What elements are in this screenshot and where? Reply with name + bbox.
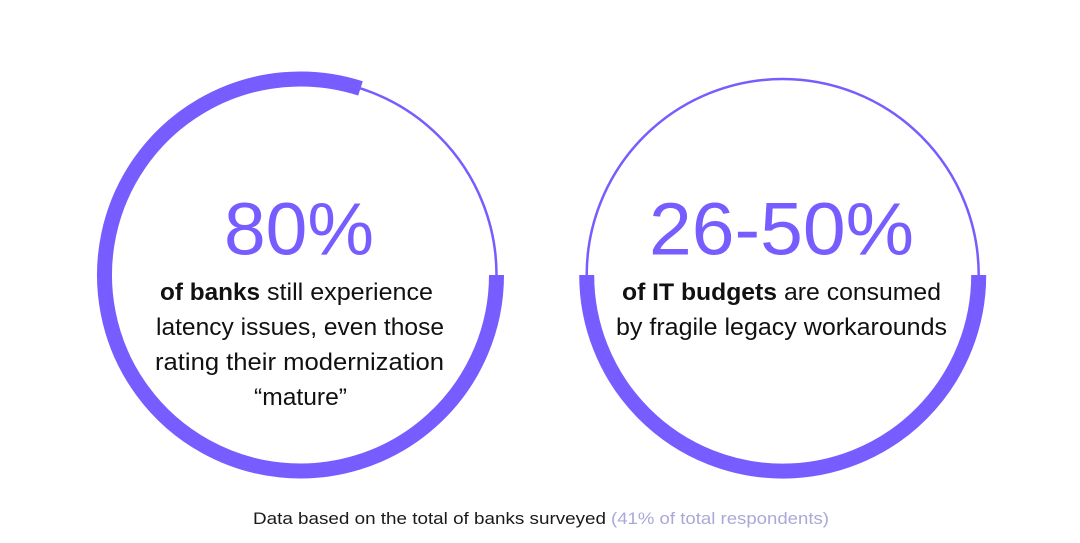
text block: banks latency description: rating their modernization bbox=[155, 349, 444, 376]
text block: banks latency description: “mature” bbox=[254, 384, 347, 411]
panel: 26-50% of IT budgets bbox=[587, 79, 979, 471]
stat: 26-50%: 26-50% bbox=[649, 188, 914, 270]
text block: banks latency description: latency issues, even those bbox=[156, 314, 444, 341]
text block: IT budgets description: by fragile legacy workarounds bbox=[616, 314, 947, 341]
text block: banks latency description: of banks bbox=[160, 279, 260, 306]
footnote: (41% of total respondents) bbox=[611, 510, 829, 528]
text block: IT budgets description: of IT budgets bbox=[622, 279, 777, 306]
stat: 80%: 80% bbox=[224, 188, 374, 270]
panel: 80% of banks bbox=[104, 79, 496, 471]
donut chart: half ring bbox=[587, 79, 979, 471]
text block: banks latency description: still experience bbox=[267, 279, 433, 306]
text block: banks latency description bbox=[155, 279, 444, 411]
text block: IT budgets description bbox=[616, 279, 947, 341]
donut chart: 80 percent bbox=[104, 79, 496, 471]
text block: IT budgets description: are consumed bbox=[784, 279, 941, 306]
footnote: Data based on the total of banks surveyed bbox=[253, 510, 606, 528]
footnote bbox=[253, 510, 829, 528]
